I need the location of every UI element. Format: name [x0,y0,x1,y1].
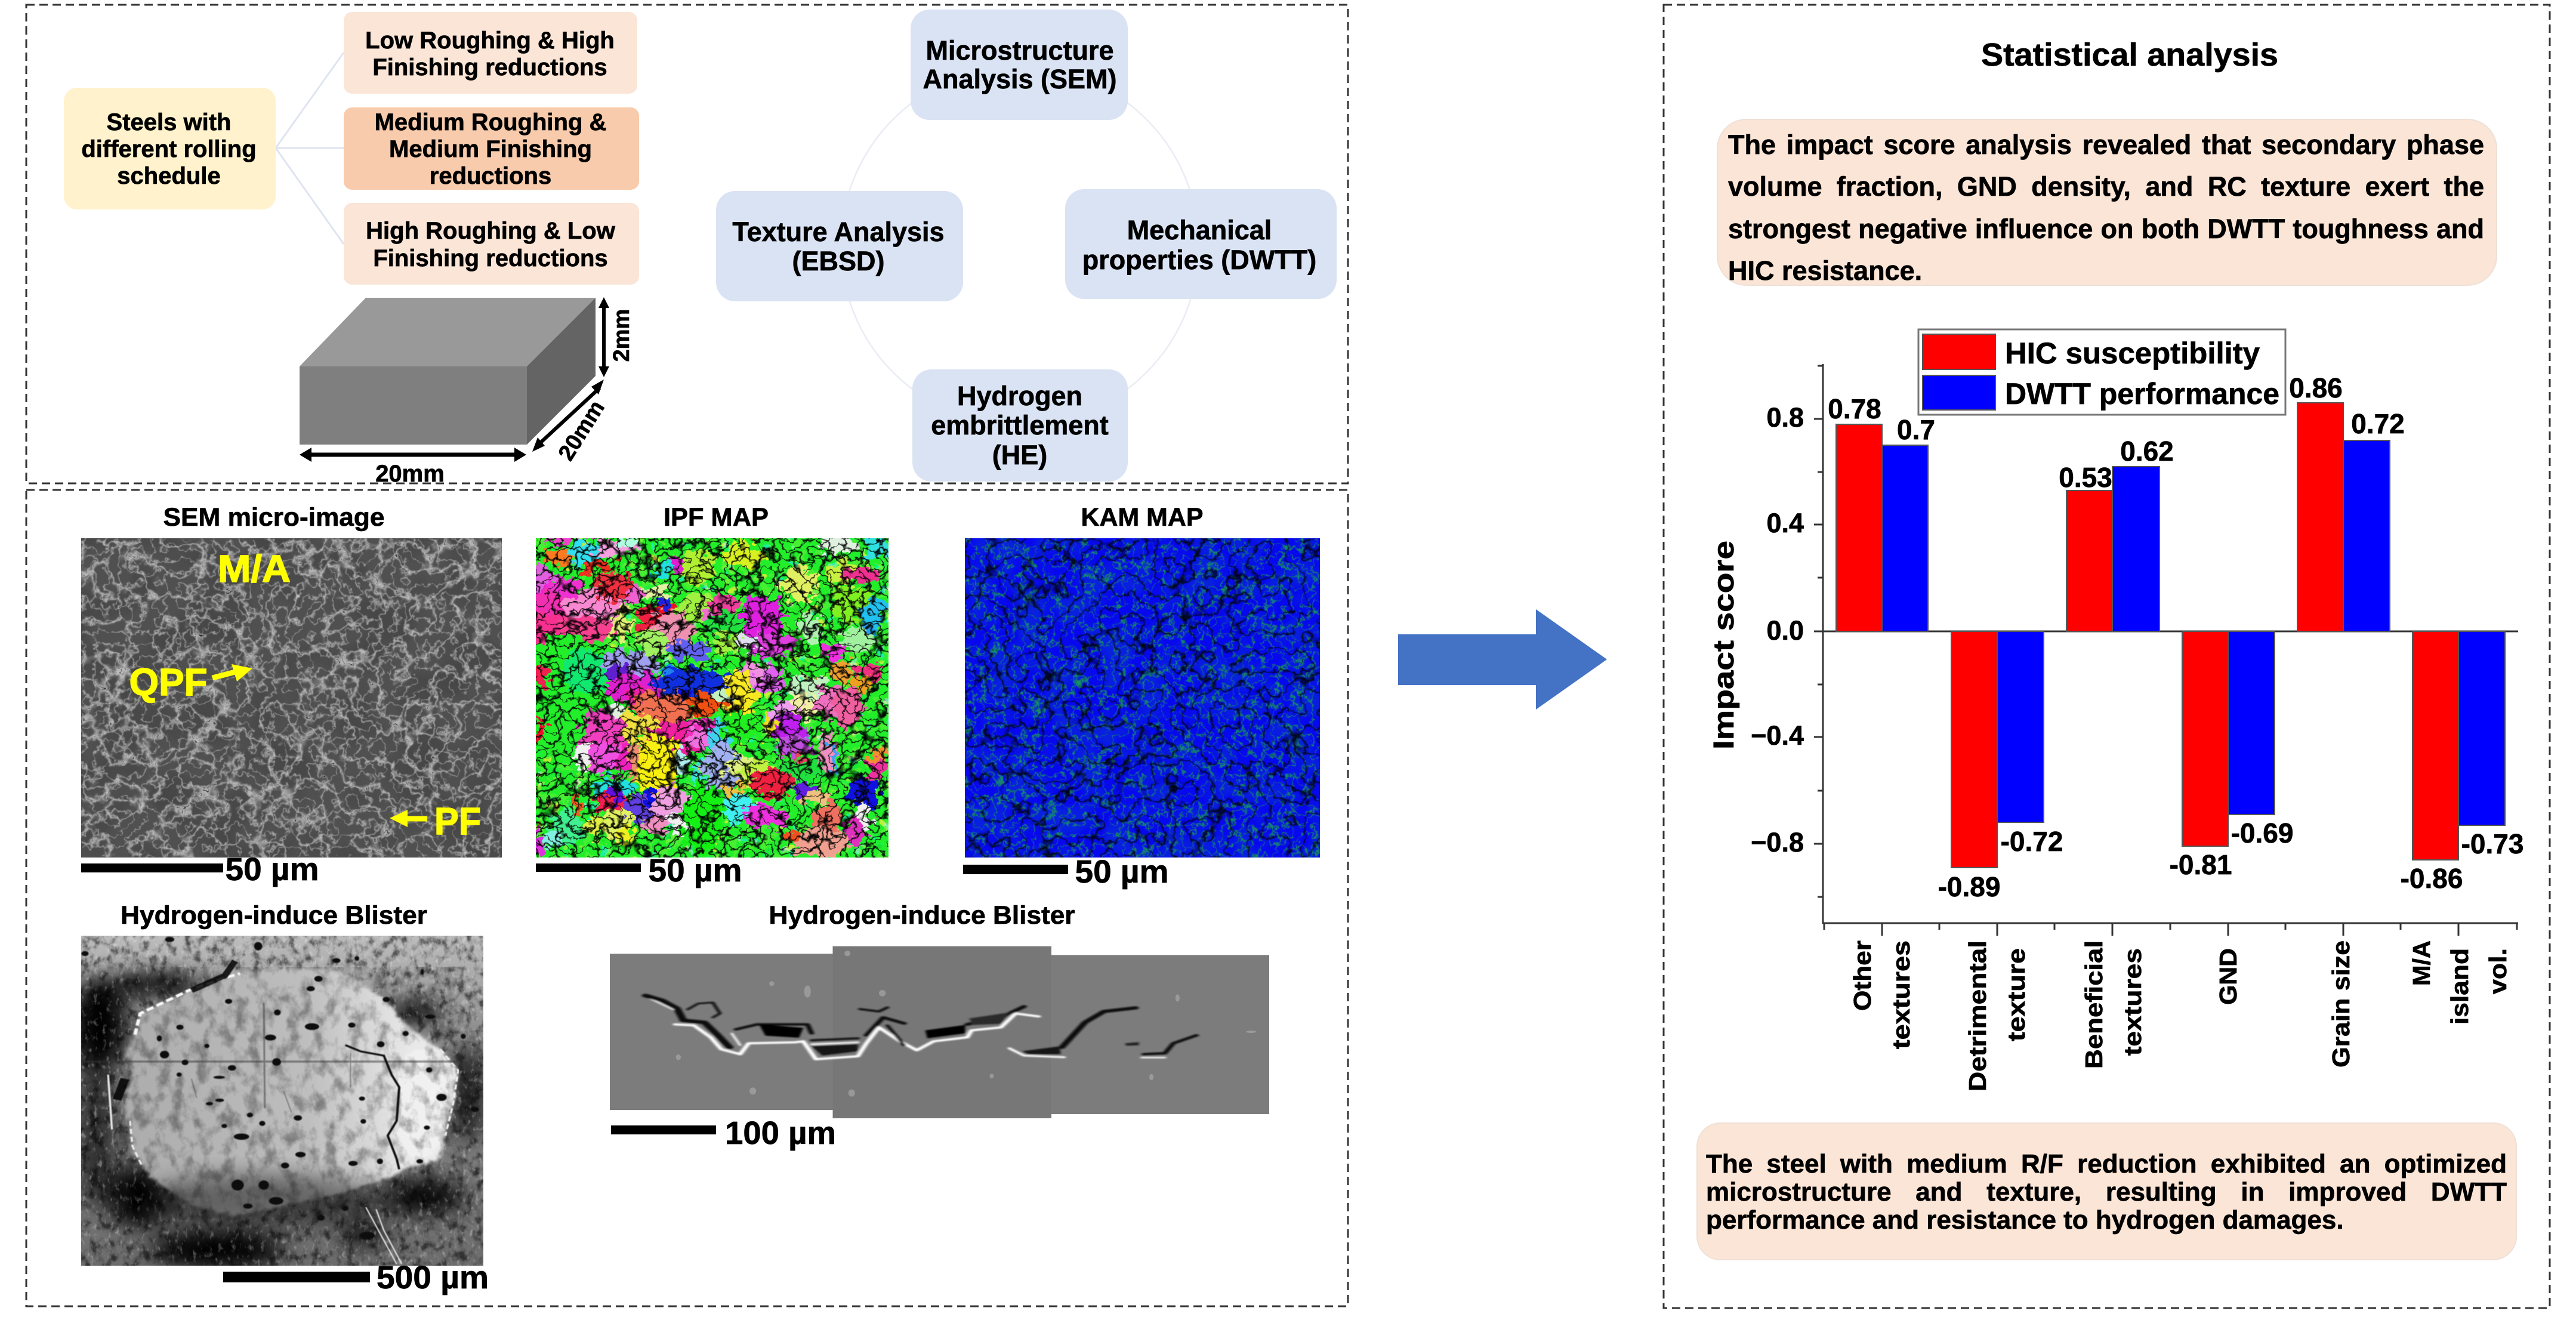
bar value labels: -0.81 [2170,849,2232,880]
panel: rolling schedule and characterization [26,5,1348,483]
category labels: Detrimental [1964,940,1991,1091]
image: surface blister micrograph [81,936,483,1266]
y axis title: Impact score [1708,541,1740,750]
image: KAM map [965,538,1320,858]
box: medium roughing medium finishing: reductions [430,163,551,189]
bar value labels: -0.86 [2401,863,2463,894]
box: hydrogen embrittlement [912,369,1128,482]
ring connecting characterization methods [841,67,1199,425]
label: PF with arrow [390,800,481,843]
panel: statistical analysis [1664,5,2550,1308]
bar value labels: -0.89 [1938,871,2000,902]
scale bar: crack 100 µm: 100 µm [725,1115,836,1151]
image: SEM micrograph [81,538,502,858]
box: low roughing high finishing: Low Roughing & High [365,27,615,54]
box: high roughing low finishing: High Roughing & Low [366,218,616,244]
category labels: Other [1849,940,1876,1011]
box: texture analysis: Texture Analysis [732,217,945,247]
category labels: vol. [2484,948,2512,994]
category labels: M/A [2408,940,2435,986]
scale bar: KAM 50 µm [963,854,1168,890]
label: M/A: M/A [218,547,291,590]
image: IPF map [536,538,889,858]
box: hydrogen embrittlement: embrittlement [931,410,1109,440]
callout: impact score finding: HIC resistance. [1728,255,1922,286]
callout: conclusion [1696,1122,2517,1260]
legend: DWTT performance [2005,377,2279,411]
category labels: textures [1887,940,1915,1049]
box: steels with different rolling schedule: Steels with [107,109,231,135]
box: low roughing high finishing [344,12,637,94]
y axis tick labels: 0.4 [1766,508,1804,538]
heading: KAM map: KAM MAP [1081,503,1203,532]
image: stitched crack micrograph [610,946,1269,1118]
bar value labels: -0.72 [2001,826,2063,857]
label: QPF with arrow: QPF [129,661,208,704]
box: high roughing low finishing: Finishing reductions [373,245,608,272]
bar value labels: -0.69 [2231,818,2293,849]
bar value labels: 0.72 [2351,408,2405,439]
heading: IPF map: IPF MAP [664,503,769,532]
box: steels with different rolling schedule [64,88,276,209]
heading: hydrogen-induced blister left: Hydrogen-induce Blister [121,901,427,930]
bars: DWTT performance [1882,440,2505,825]
box: texture analysis: (EBSD) [792,246,884,276]
bar value labels: 0.62 [2120,436,2174,467]
bar value labels: 0.86 [2289,372,2343,403]
y axis tick labels: −0.8 [1751,827,1804,858]
category labels: Grain size [2327,940,2355,1068]
category labels: textures [2119,948,2146,1056]
bar chart: impact score [1708,329,2523,1091]
bar value labels [1828,372,2523,902]
steel sample block with dimensions [300,297,634,487]
callout: impact score finding: strongest negative influence on both DWTT toughness and [1728,214,2484,244]
callout: conclusion: microstructure and texture, resulting in improved DWTT [1706,1177,2507,1207]
bar value labels: 0.53 [2059,462,2112,493]
callout: impact score finding: The impact score analysis revealed that secondary phase [1728,129,2484,160]
heading: hydrogen-induced blister right: Hydrogen-induce Blister [769,901,1075,930]
box: medium roughing medium finishing: Medium Finishing [389,136,592,162]
box: microstructure analysis: Analysis (SEM) [923,64,1117,94]
y axis tick labels: −0.4 [1751,720,1804,751]
callout: impact score finding: volume fraction, GND density, and RC texture exert the [1728,171,2484,202]
callout: conclusion: The steel with medium R/F reduction exhibited an optimized [1706,1149,2507,1179]
callout: impact score finding [1717,119,2497,286]
box: high roughing low finishing [344,203,639,285]
label: QPF with arrow [129,661,252,704]
box: microstructure analysis: Microstructure [925,35,1114,66]
chart axes and ticks [1814,364,2518,936]
scale bar: IPF 50 µm: 50 µm [648,853,742,889]
category labels: island [2446,948,2473,1025]
scale bar: IPF 50 µm [536,853,742,889]
panel: microstructure images [26,490,1348,1306]
bar value labels: 0.7 [1897,414,1935,445]
bar value labels: 0.78 [1828,393,1881,424]
box: hydrogen embrittlement: Hydrogen [957,381,1082,411]
box: hydrogen embrittlement: (HE) [992,440,1047,470]
category labels: texture [2003,948,2030,1041]
scale bar: blister 500 µm: 500 µm [377,1260,489,1296]
heading: statistical analysis: Statistical analysis [1981,37,2278,73]
tree connectors from steels box to rolling schedules [276,53,344,244]
y axis tick labels: 0.0 [1766,615,1804,646]
scale bar: KAM 50 µm: 50 µm [1075,854,1168,890]
category labels [1849,940,2512,1091]
scale bar: SEM 50 µm: 50 µm [226,852,319,887]
legend: HIC susceptibility [2005,337,2260,370]
bars: HIC susceptibility [1836,403,2458,868]
bar value labels: -0.73 [2461,828,2523,859]
steel sample block with dimensions: 2mm [609,309,634,362]
scale bar: crack 100 µm [611,1115,836,1151]
box: steels with different rolling schedule: schedule [117,163,221,189]
box: medium roughing medium finishing: Medium Roughing & [375,109,606,135]
scale bar: SEM 50 µm [81,852,319,887]
box: low roughing high finishing: Finishing reductions [372,54,607,81]
label: PF with arrow: PF [434,800,481,843]
scale bar: blister 500 µm [223,1260,489,1296]
box: mechanical properties [1065,189,1337,299]
category labels: GND [2214,948,2242,1005]
steel sample block with dimensions: 20mm [554,396,610,465]
box: steels with different rolling schedule: different rolling [81,136,257,162]
arrow: left panels to statistical analysis [1398,609,1607,710]
box: medium roughing medium finishing [344,107,639,190]
legend [1918,329,2285,415]
box: texture analysis [716,191,963,301]
box: mechanical properties: properties (DWTT) [1082,245,1316,275]
box: mechanical properties: Mechanical [1127,215,1272,245]
box: microstructure analysis [911,10,1128,120]
y axis tick labels: 0.8 [1766,402,1804,433]
callout: conclusion: performance and resistance to hydrogen damages. [1706,1205,2344,1235]
heading: SEM micro-image: SEM micro-image [163,503,384,532]
steel sample block with dimensions: 20mm [375,461,445,487]
y axis tick labels [1751,402,1804,858]
category labels: Beneficial [2080,940,2108,1069]
